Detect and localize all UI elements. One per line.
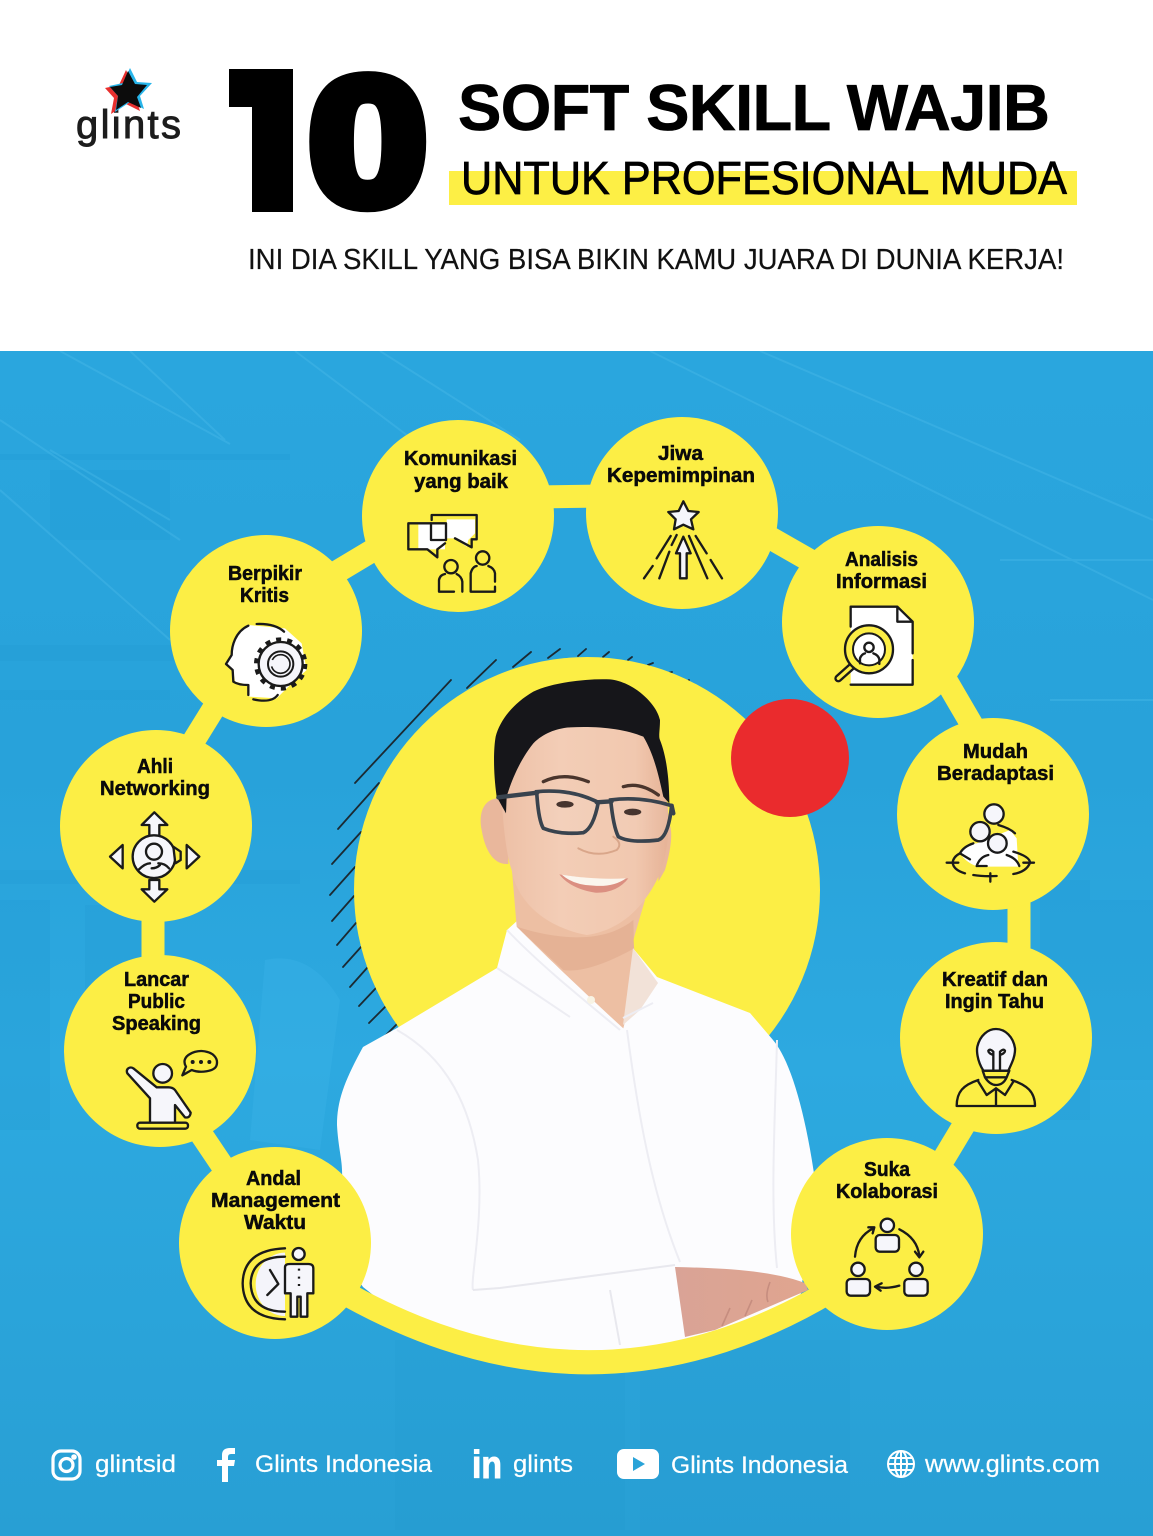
shirt collar <box>497 930 658 1030</box>
skill: Suka Kolaborasi <box>791 1138 983 1330</box>
ears <box>481 798 508 864</box>
skill: Mudah Beradaptasi: Mudah <box>963 741 1028 763</box>
facebook name: Glints Indonesia <box>255 1451 433 1478</box>
red accent circle <box>731 699 849 817</box>
skill: Kreatif dan Ingin Tahu: Kreatif dan <box>942 969 1048 991</box>
skill: Berpikir Kritis: Kritis <box>240 585 289 607</box>
shirt <box>337 900 815 1360</box>
tagline: INI DIA SKILL YANG BISA BIKIN KAMU JUARA DI DUNIA KERJA! <box>248 244 1064 276</box>
ring connectors <box>153 496 1019 1180</box>
icon: document with magnifier <box>838 607 913 685</box>
face <box>502 720 669 935</box>
portrait: smiling man in white shirt <box>337 679 815 1360</box>
skill: Analisis Informasi: Analisis <box>845 549 918 571</box>
skill: Lancar Public Speaking: Lancar <box>124 969 189 991</box>
skill: Jiwa Kepemimpinan: Jiwa <box>658 443 704 465</box>
eyes <box>556 801 574 808</box>
skill: Berpikir Kritis <box>170 535 362 727</box>
skill: Andal Management Waktu <box>179 1147 371 1339</box>
skill: Jiwa Kepemimpinan <box>586 417 778 609</box>
skill: Lancar Public Speaking: Speaking <box>112 1013 201 1035</box>
hand <box>675 1267 808 1337</box>
icon: linkedin: in <box>472 1444 502 1487</box>
skill: Analisis Informasi <box>782 526 974 718</box>
bottom arc <box>350 1296 820 1362</box>
icon: star with arrow <box>644 501 722 578</box>
icon: three people with cycle arrows <box>847 1219 928 1296</box>
header background <box>0 0 1153 351</box>
smile <box>559 874 628 893</box>
youtube name: Glints Indonesia <box>671 1452 849 1479</box>
skill: Andal Management Waktu: Management <box>211 1190 340 1212</box>
skill: Berpikir Kritis: Berpikir <box>228 563 302 585</box>
eyebrows <box>543 777 588 782</box>
skill: Komunikasi yang baik: yang baik <box>414 471 509 493</box>
icon: youtube <box>617 1449 659 1479</box>
logo: glints <box>76 68 181 147</box>
large yellow circle behind portrait <box>354 657 820 1123</box>
skill: Komunikasi yang baik <box>362 420 554 612</box>
icon: person with four arrows <box>110 812 199 902</box>
glasses <box>498 793 673 813</box>
instagram handle: glintsid <box>95 1451 176 1478</box>
skill: Suka Kolaborasi: Suka <box>864 1159 911 1181</box>
neck <box>512 867 645 1028</box>
linkedin name: glints <box>513 1451 573 1478</box>
hair <box>494 679 669 813</box>
footer: social links <box>53 1444 1100 1487</box>
head in zoomed coordinates <box>481 679 673 1028</box>
blue office photo background <box>0 351 1153 1536</box>
icon: globe <box>888 1451 914 1477</box>
skill: Analisis Informasi: Informasi <box>836 571 927 593</box>
skill: Mudah Beradaptasi: Beradaptasi <box>937 763 1054 785</box>
icon: speech bubbles and people <box>408 515 495 592</box>
subtitle with highlight: UNTUK PROFESIONAL MUDA <box>461 152 1067 204</box>
logo: glints: glints <box>76 103 181 147</box>
title number 10 <box>229 69 426 212</box>
skill: Jiwa Kepemimpinan: Kepemimpinan <box>607 465 755 487</box>
skill: Ahli Networking <box>60 730 252 922</box>
skill: Andal Management Waktu: Waktu <box>244 1212 306 1234</box>
skill: Mudah Beradaptasi <box>897 718 1089 910</box>
skill: Komunikasi yang baik: Komunikasi <box>404 448 517 470</box>
nose <box>578 837 619 854</box>
icon: group within target ring <box>947 804 1034 882</box>
skill: Kreatif dan Ingin Tahu <box>900 942 1092 1134</box>
skill: Andal Management Waktu: Andal <box>246 1168 301 1190</box>
skill: Lancar Public Speaking: Public <box>128 991 185 1013</box>
skill: Ahli Networking: Ahli <box>137 756 173 778</box>
skill: Ahli Networking: Networking <box>100 778 210 800</box>
skill: Lancar Public Speaking <box>64 955 256 1147</box>
title number 10: 0 <box>308 40 427 242</box>
website: www.glints.com <box>924 1451 1100 1478</box>
icon: clock and person <box>243 1248 313 1319</box>
icon: speaker raising hand <box>127 1051 217 1129</box>
icon: instagram <box>53 1451 80 1479</box>
title number 10: 1 <box>216 36 327 259</box>
diagonal hatch lines <box>330 649 689 1039</box>
icon: facebook <box>217 1448 235 1482</box>
skill: Suka Kolaborasi: Kolaborasi <box>836 1181 938 1203</box>
skill: Kreatif dan Ingin Tahu: Ingin Tahu <box>945 991 1044 1013</box>
title: soft skill wajib: SOFT SKILL WAJIB <box>458 71 1050 144</box>
icon: light bulb head person <box>957 1029 1035 1106</box>
icon: head with gear <box>225 624 307 701</box>
